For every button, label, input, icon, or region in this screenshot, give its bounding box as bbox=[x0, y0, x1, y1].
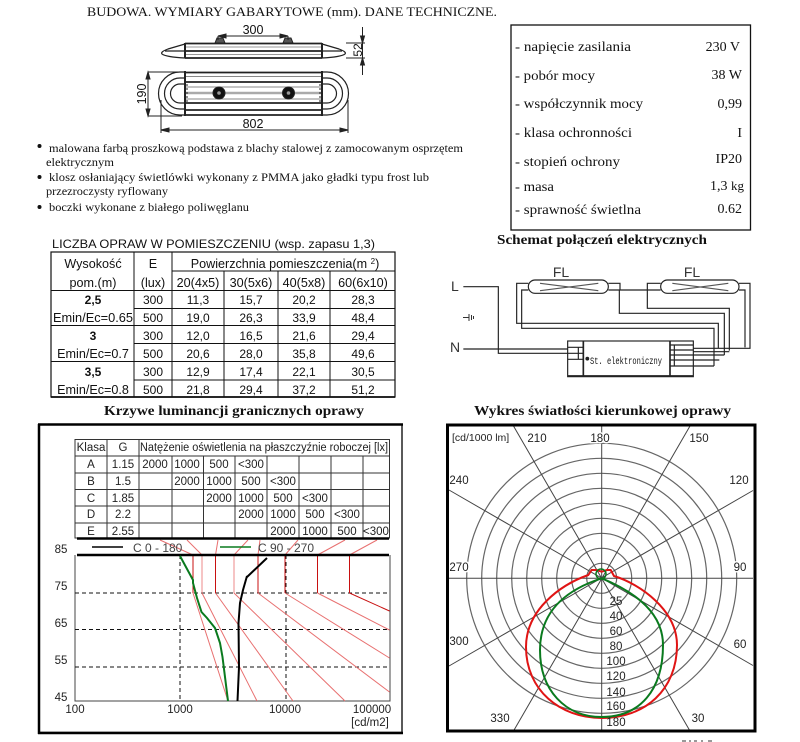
y axis labels: 55 bbox=[55, 655, 67, 667]
y axis labels: 85 bbox=[55, 544, 67, 556]
illuminance class table: 2000 bbox=[142, 459, 168, 471]
table header: 60(6x10) bbox=[338, 276, 388, 290]
description bullets: malowana farbą proszkową podstawa z blachy stalowej z zamocowanym osprzętem bbox=[49, 143, 463, 155]
table rows: 500 bbox=[143, 311, 163, 325]
illuminance class table: 1.15 bbox=[112, 459, 134, 471]
table rows: 33,9 bbox=[292, 311, 316, 325]
table rows: 35,8 bbox=[292, 347, 316, 361]
illuminance class table: <300 bbox=[270, 476, 296, 488]
dimension labels: 52 bbox=[351, 43, 365, 57]
small green loop bbox=[596, 569, 606, 579]
table rows: 29,4 bbox=[239, 383, 263, 397]
wires bbox=[463, 283, 750, 366]
top view bbox=[146, 71, 348, 133]
table rows: 51,2 bbox=[351, 383, 375, 397]
table rows: 2,5 bbox=[85, 293, 102, 307]
illuminance class table: 1.5 bbox=[115, 476, 131, 488]
radial scale labels: 25 bbox=[610, 596, 622, 608]
illuminance class table: 2000 bbox=[206, 493, 232, 505]
wiring diagram bbox=[463, 280, 750, 377]
spec values: 38 W bbox=[712, 68, 743, 83]
illuminance class table: 1000 bbox=[238, 493, 264, 505]
grid bbox=[75, 555, 390, 701]
y axis labels bbox=[55, 544, 67, 704]
table rows: 15,7 bbox=[239, 293, 263, 307]
table rows: 300 bbox=[143, 293, 163, 307]
spec values bbox=[706, 40, 744, 217]
illuminance class table: 500 bbox=[241, 476, 261, 488]
table header: 40(5x8) bbox=[283, 276, 325, 290]
description bullets: klosz osłaniający świetlówki wykonany z PMMA jako gładki typu frost lub bbox=[49, 172, 429, 184]
illuminance class table: 1000 bbox=[270, 509, 296, 521]
y axis labels: 45 bbox=[55, 692, 67, 704]
side view bbox=[162, 27, 365, 75]
polar frame bbox=[448, 425, 755, 731]
radial lines bbox=[449, 426, 753, 731]
spec labels: - współczynnik mocy bbox=[515, 97, 643, 112]
unit and angle labels: 330 bbox=[490, 713, 510, 725]
table header: E bbox=[149, 257, 157, 271]
unit and angle labels: 60 bbox=[734, 639, 746, 651]
spec values: 230 V bbox=[706, 40, 740, 55]
illuminance class table: 1000 bbox=[174, 459, 200, 471]
illuminance class table: D bbox=[87, 509, 95, 521]
spec labels bbox=[515, 40, 643, 218]
table header: pom.(m) bbox=[70, 276, 116, 290]
table title: LICZBA OPRAW W POMIESZCZENIU (wsp. zapasu 1,3) bbox=[52, 237, 375, 251]
x axis labels: 1000 bbox=[167, 704, 193, 716]
radial scale labels: 60 bbox=[610, 626, 622, 638]
technical data panel bbox=[511, 25, 750, 230]
table rows: 11,3 bbox=[187, 293, 210, 307]
radial scale labels bbox=[606, 596, 626, 729]
illuminance class table: G bbox=[119, 442, 128, 454]
dimension labels bbox=[135, 23, 365, 131]
spec values: 0.62 bbox=[718, 202, 742, 217]
dimension labels: 300 bbox=[243, 23, 263, 37]
unit and angle labels: 240 bbox=[449, 475, 469, 487]
illuminance class table: <300 bbox=[238, 459, 264, 471]
wiring labels bbox=[450, 264, 700, 368]
illuminance class table: 2.55 bbox=[112, 526, 134, 538]
unit and angle labels: 300 bbox=[449, 636, 469, 648]
illuminance class table: 2000 bbox=[174, 476, 200, 488]
unit and angle labels: [cd/1000 lm] bbox=[452, 432, 509, 444]
red curve bbox=[526, 570, 677, 718]
red limit curves bbox=[160, 540, 390, 701]
unit and angle labels: 120 bbox=[729, 475, 749, 487]
radial scale labels: 100 bbox=[606, 656, 626, 668]
table rows: 22,1 bbox=[292, 365, 316, 379]
x axis labels: [cd/m2] bbox=[351, 717, 389, 729]
table rows: Emin/Ec=0.7 bbox=[57, 347, 129, 361]
table rows: 30,5 bbox=[351, 365, 375, 379]
table rows bbox=[53, 293, 375, 397]
radial scale labels: 80 bbox=[610, 641, 622, 653]
illuminance class table: 500 bbox=[305, 509, 325, 521]
table rows: 17,4 bbox=[239, 365, 263, 379]
illuminance class table bbox=[75, 440, 390, 538]
spec labels: - masa bbox=[515, 180, 555, 195]
spec values: 0,99 bbox=[718, 97, 742, 112]
x axis labels bbox=[65, 704, 391, 729]
table rows: 29,4 bbox=[351, 329, 375, 343]
description bullets: przezroczysty ryflowany bbox=[46, 186, 168, 198]
dimension labels: 802 bbox=[243, 117, 263, 131]
table rows: 28,3 bbox=[351, 293, 375, 307]
illuminance class table: 1000 bbox=[302, 526, 328, 538]
table rows: 500 bbox=[143, 383, 163, 397]
table rows: Emin/Ec=0.65 bbox=[53, 311, 133, 325]
fluorescent lamps bbox=[528, 280, 739, 293]
spec labels: - pobór mocy bbox=[515, 69, 595, 84]
illuminance class table: C bbox=[87, 493, 95, 505]
table rows: 37,2 bbox=[292, 383, 316, 397]
table header: 20(4x5) bbox=[177, 276, 219, 290]
unit and angle labels: 90 bbox=[734, 562, 746, 574]
green curve bbox=[180, 556, 228, 701]
illuminance class table: 1000 bbox=[206, 476, 232, 488]
illuminance class table: <300 bbox=[334, 509, 360, 521]
concentric circles bbox=[467, 443, 737, 713]
table rows: 48,4 bbox=[351, 311, 375, 325]
ballast bbox=[568, 341, 745, 377]
main title: BUDOWA. WYMIARY GABARYTOWE (mm). DANE TECHNICZNE. bbox=[87, 4, 497, 19]
illuminance class table: B bbox=[87, 476, 95, 488]
description bullets: boczki wykonane z białego poliwęglanu bbox=[49, 202, 249, 214]
x axis labels: 100000 bbox=[353, 704, 391, 716]
radial scale labels: 140 bbox=[606, 687, 626, 699]
illuminance class table: 1.85 bbox=[112, 493, 134, 505]
polar intensity chart panel bbox=[448, 425, 755, 731]
x axis labels: 100 bbox=[65, 704, 85, 716]
legend: C 90 - 270 bbox=[258, 541, 314, 555]
polar chart heading: Wykres światłości kierunkowej oprawy bbox=[474, 404, 731, 419]
radial scale labels: 180 bbox=[606, 717, 626, 729]
illuminance class table: 2000 bbox=[270, 526, 296, 538]
legend: C 0 - 180 bbox=[133, 541, 183, 555]
table header: 30(5x6) bbox=[230, 276, 272, 290]
wiring labels: L bbox=[451, 278, 459, 294]
luminance chart heading: Krzywe luminancji granicznych oprawy bbox=[104, 404, 364, 419]
wiring labels: FL bbox=[684, 264, 700, 280]
wiring labels: St. elektroniczny bbox=[590, 356, 662, 368]
wiring labels: FL bbox=[553, 264, 569, 280]
table rows: 20,2 bbox=[292, 293, 316, 307]
radial scale labels: 120 bbox=[606, 671, 626, 683]
spec values: IP20 bbox=[716, 152, 742, 167]
illuminance class table: Natężenie oświetlenia na płaszczyźnie roboczej [lx] bbox=[140, 442, 388, 454]
unit and angle labels bbox=[449, 432, 749, 725]
unit and angle labels: 270 bbox=[449, 562, 469, 574]
dimension labels: 190 bbox=[135, 84, 149, 104]
illuminance class table: A bbox=[87, 459, 95, 471]
table rows: 500 bbox=[143, 347, 163, 361]
table rows: 21,8 bbox=[186, 383, 210, 397]
table rows: 12,0 bbox=[186, 329, 210, 343]
legend bbox=[92, 541, 314, 555]
green curve bbox=[540, 578, 663, 717]
spec values: I bbox=[737, 126, 742, 141]
illuminance class table: 2000 bbox=[238, 509, 264, 521]
unit and angle labels: 30 bbox=[692, 713, 704, 725]
description bullets: elektrycznym bbox=[46, 157, 114, 169]
illuminance class table: <300 bbox=[363, 526, 389, 538]
table rows: 21,6 bbox=[292, 329, 316, 343]
description bullets bbox=[38, 143, 463, 214]
dimension drawing of luminaire bbox=[135, 23, 365, 133]
table rows: 12,9 bbox=[186, 365, 210, 379]
table header: (lux) bbox=[141, 276, 165, 290]
wiring heading: Schemat połączeń elektrycznych bbox=[497, 233, 707, 248]
table rows: 20,6 bbox=[186, 347, 210, 361]
unit and angle labels: 210 bbox=[527, 433, 547, 445]
table header: 2 bbox=[371, 257, 376, 266]
illuminance class table: Klasa bbox=[77, 442, 106, 454]
black curve bbox=[238, 558, 267, 701]
illuminance class table: 500 bbox=[273, 493, 293, 505]
wiring labels: N bbox=[450, 339, 460, 355]
luminance limit chart panel bbox=[38, 424, 403, 734]
table header: Powierzchnia pomieszczenia(m bbox=[191, 257, 367, 271]
spec labels: - stopień ochrony bbox=[515, 155, 620, 170]
x axis labels: 10000 bbox=[269, 704, 301, 716]
spec values: 1,3 kg bbox=[710, 178, 744, 194]
radial scale labels: 160 bbox=[606, 701, 626, 713]
thick bands bbox=[77, 538, 389, 555]
spec labels: - napięcie zasilania bbox=[515, 40, 632, 55]
illuminance class table: E bbox=[87, 526, 95, 538]
y axis labels: 65 bbox=[55, 618, 67, 630]
table: number of luminaires bbox=[51, 252, 395, 397]
table rows: Emin/Ec=0.8 bbox=[57, 383, 129, 397]
table rows: 28,0 bbox=[239, 347, 263, 361]
unit and angle labels: 150 bbox=[689, 433, 709, 445]
spec labels: - sprawność świetlna bbox=[515, 203, 642, 218]
table rows: 3,5 bbox=[85, 365, 102, 379]
table rows: 19,0 bbox=[186, 311, 210, 325]
table rows: 16,5 bbox=[239, 329, 263, 343]
illuminance class table: 2.2 bbox=[115, 509, 131, 521]
table header bbox=[64, 257, 388, 290]
table header: ) bbox=[375, 257, 379, 271]
unit and angle labels: 180 bbox=[590, 433, 610, 445]
table rows: 49,6 bbox=[351, 347, 375, 361]
illuminance class table: <300 bbox=[302, 493, 328, 505]
illuminance class table: 500 bbox=[209, 459, 229, 471]
radial scale labels: 40 bbox=[610, 611, 622, 623]
table rows: 26,3 bbox=[239, 311, 263, 325]
y axis labels: 75 bbox=[55, 581, 67, 593]
table rows: 3 bbox=[90, 329, 97, 343]
illuminance class table: 500 bbox=[337, 526, 357, 538]
table rows: 300 bbox=[143, 329, 163, 343]
table rows: 300 bbox=[143, 365, 163, 379]
table header: Wysokość bbox=[64, 257, 122, 271]
spec labels: - klasa ochronności bbox=[515, 126, 632, 141]
